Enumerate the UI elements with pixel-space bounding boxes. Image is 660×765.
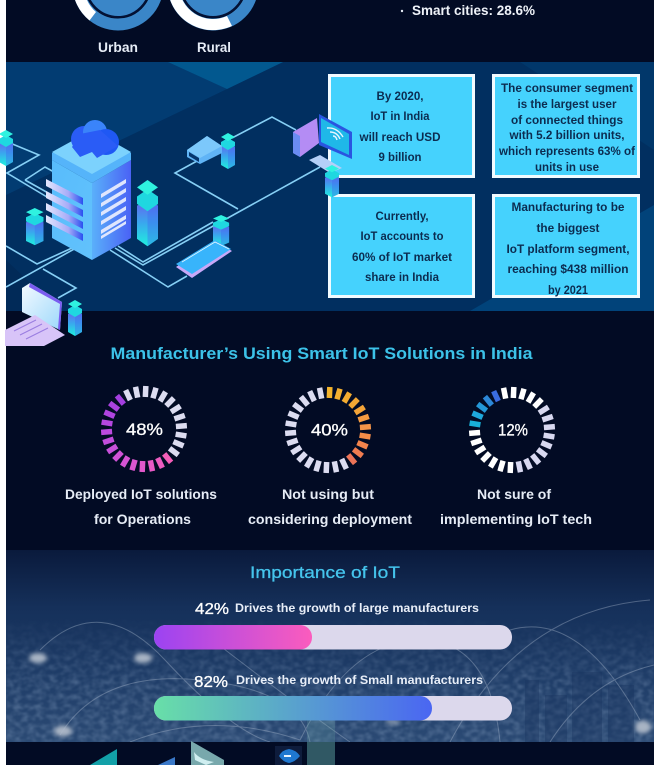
stat: 82 percent: Drives the growth of Small manufacturers	[236, 673, 483, 687]
card: manufacturing: by 2021	[548, 285, 589, 297]
card: consumer segment: which represents 63% of	[498, 146, 635, 158]
label: urban: Urban	[98, 40, 138, 55]
card: manufacturing: Manufacturing to be	[512, 202, 624, 214]
label: considering: Not using but	[282, 487, 375, 502]
donut: 12 percent	[469, 387, 555, 473]
card: consumer segment: The consumer segment	[501, 83, 633, 95]
label: considering: considering deployment	[248, 512, 413, 527]
panel: IoT network illustration band	[6, 62, 654, 311]
donut: urban	[72, 0, 158, 24]
skyline	[525, 672, 634, 742]
icon: laptop	[5, 283, 65, 346]
heading: importance of IoT: Importance of IoT	[250, 563, 400, 582]
card: manufacturing: IoT platform segment,	[506, 244, 630, 256]
label: deployed: Deployed IoT solutions	[65, 487, 217, 502]
card: USD 9 billion: will reach USD	[358, 132, 440, 144]
icon: smartphone	[176, 240, 232, 278]
icon: node columns	[0, 130, 235, 336]
icon: blue shard	[158, 757, 175, 765]
card: manufacturing: reaching $438 million	[508, 264, 628, 276]
icon: light teal panel	[191, 741, 224, 765]
label: not sure: implementing IoT tech	[440, 512, 592, 527]
label: deployed: for Operations	[94, 512, 191, 527]
card: consumer segment	[494, 76, 638, 176]
network connection lines	[6, 117, 320, 298]
stat: 82 percent: 82%	[194, 674, 228, 691]
stat: 42 percent: Drives the growth of large manufacturers	[235, 601, 479, 615]
heading: manufacturers: Manufacturer’s Using Smart IoT Solutions in India	[110, 344, 533, 363]
icon: teal shard	[90, 749, 117, 765]
stat: 82 percent	[194, 673, 483, 691]
card: USD 9 billion: IoT in India	[370, 111, 430, 123]
panel: importance of IoT city background	[6, 550, 654, 742]
card: consumer segment: is the largest user	[518, 99, 617, 111]
donut: 40 percent: 40%	[311, 420, 348, 440]
label: considering	[248, 487, 413, 527]
icon: desktop computer with wifi	[293, 114, 352, 197]
label: rural: Rural	[197, 40, 231, 55]
translucent column base	[307, 742, 335, 765]
icon: server with cloud	[46, 120, 131, 260]
card: market share: Currently,	[376, 211, 428, 223]
icon: router	[187, 136, 222, 164]
donut: rural	[168, 0, 252, 30]
bullet: smart cities: Smart cities: 28.6%	[412, 3, 535, 18]
icon: cloud	[71, 120, 119, 158]
donut: 48 percent: 48%	[126, 420, 163, 439]
bar: 82 percent	[154, 696, 512, 720]
label: deployed	[65, 487, 217, 527]
donut: 48 percent	[101, 386, 187, 472]
card: market share	[330, 196, 474, 296]
card: consumer segment: with 5.2 billion units,	[508, 130, 624, 142]
card: market share: share in India	[365, 272, 440, 284]
label: not sure	[440, 487, 592, 527]
server text panel	[101, 179, 126, 239]
stat: 42 percent: 42%	[195, 601, 229, 618]
card: market share: IoT accounts to	[360, 231, 444, 243]
card: USD 9 billion: By 2020,	[376, 91, 424, 103]
panel: bottom dark strip with cropped icons	[6, 741, 654, 765]
card: USD 9 billion	[330, 76, 474, 176]
card: manufacturing: the biggest	[536, 223, 600, 235]
translucent column	[307, 720, 335, 742]
card: consumer segment: units in use	[535, 162, 599, 174]
arcs	[40, 600, 654, 742]
card: manufacturing	[494, 196, 638, 297]
glowing lights	[29, 653, 651, 736]
card: USD 9 billion: 9 billion	[378, 152, 422, 164]
card: market share: 60% of IoT market	[352, 252, 452, 264]
stat: 42 percent	[195, 601, 479, 618]
card: consumer segment: of connected things	[511, 115, 623, 127]
bar: 42 percent	[154, 625, 512, 650]
label: not sure: Not sure of	[477, 487, 552, 502]
server slots	[46, 179, 83, 241]
donut: 40 percent	[285, 387, 371, 473]
donut: 12 percent: 12%	[498, 420, 528, 440]
icon: blue shield	[275, 746, 302, 765]
panel: urban and rural donuts	[72, 0, 252, 30]
